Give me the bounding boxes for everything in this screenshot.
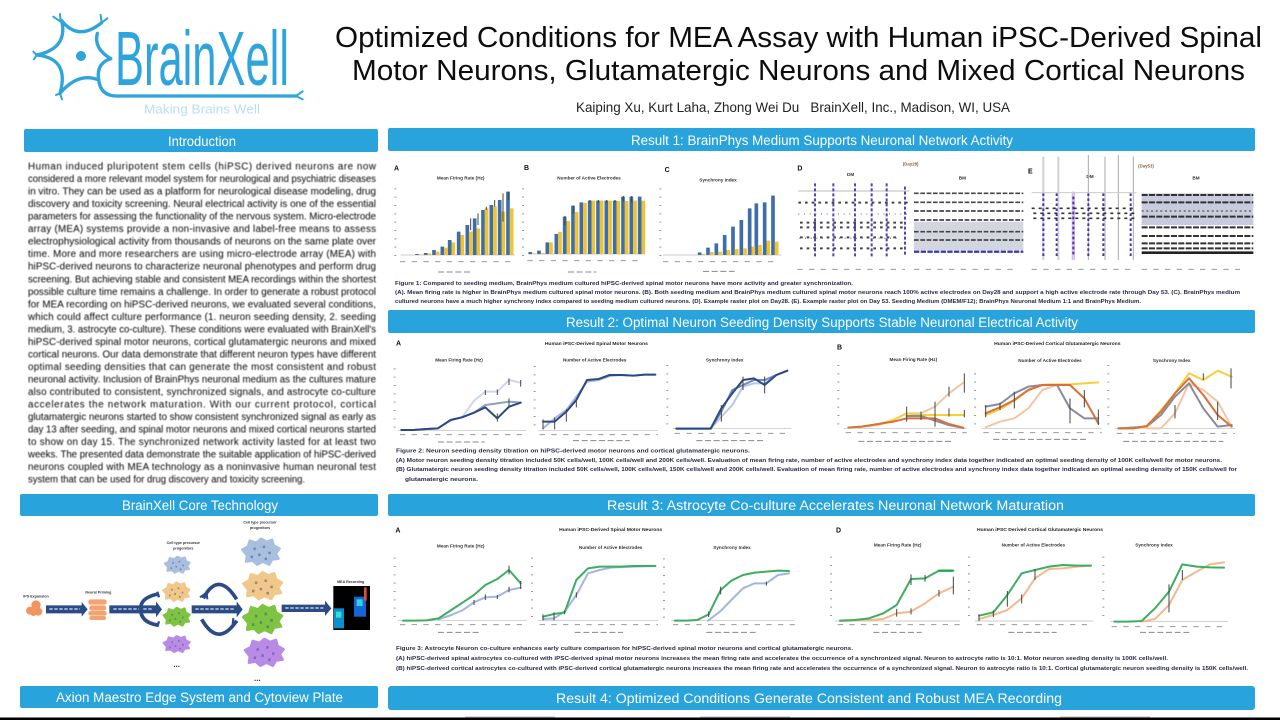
text block: introduction: accelerates the network maturation. With our current protocol, cortical: [28, 400, 376, 411]
panel: figure 3D cortical neurons: D: [836, 527, 841, 534]
caption: figure 2: [396, 448, 1238, 483]
bar chart: mean firing rate: A: [394, 166, 399, 173]
caption: figure 1: Figure 1: Compared to seeding medium, BrainPhys medium cultured hiPSC-derived spinal motor neurons have more activity and greater synchronization.: [395, 281, 853, 287]
text block: introduction: which could affect culture performance (1. neuron seeding density, 2. seeding: [27, 312, 376, 323]
line chart: synchrony index: Synchrony Index: [1153, 358, 1191, 363]
text block: introduction: neurons coupled with MEA technology as a noninvasive human neuronal test: [28, 462, 376, 473]
line chart: mean firing rate: [395, 358, 526, 442]
caption: figure 2: glutamatergic neurons.: [405, 477, 478, 483]
labels: diagram text: Cell type precursor: [167, 541, 201, 545]
icon: expanded progenitor cells: [242, 539, 284, 666]
arrow: expansion loop: [200, 584, 238, 634]
text block: introduction: system that can be used for drug discovery and toxicity screening.: [28, 475, 305, 486]
text block: introduction: screening. But achieving stable and consistent MEA recordings within the shortest: [28, 274, 376, 285]
line chart: active electrodes: [535, 358, 658, 441]
line chart: synchrony index: [664, 545, 795, 632]
bar chart: mean firing rate: Mean Firing Rate (Hz): [437, 175, 485, 180]
labels: diagram text: progenitors: [173, 547, 193, 551]
panel: figure 3D cortical neurons: [831, 527, 1228, 632]
bar chart: mean firing rate: [394, 166, 515, 272]
title: Optimized Conditions for MEA Assay with Human iPSC-Derived Spinal: [335, 22, 1262, 54]
text block: introduction: time. More and more researchers are using micro-electrode array (MEA) with: [28, 249, 376, 260]
panel: figure 1 bar charts: [394, 165, 781, 272]
labels: diagram text: progenitors: [250, 526, 270, 530]
text block: introduction: weeks. The presented data demonstrate the suitable application of hiPSC-derived: [27, 450, 376, 461]
caption: figure 3: (A) hiPSC-derived spinal astrocytes co-cultured with iPSC-derived spinal motor neurons increases the mean firing rate and accelerates the occurrence of a synchronized signal. Neuron to astrocyte ratio is 10:1. Motor neuron seeding density is 100K cells/well.: [396, 656, 1168, 662]
diagram: differentiation workflow: [23, 521, 370, 683]
bar chart: synchrony index: C: [665, 167, 670, 174]
logo: BrainXell: [33, 14, 303, 116]
heading: introduction: [24, 129, 378, 152]
text block: introduction: neuronal activity. Inclusion of BrainPhys neuronal medium as the cultures mature: [28, 374, 377, 386]
raster plot: D BrainPhys: [914, 175, 1023, 269]
caption: figure 2: Figure 2: Neuron seeding density titration on hiPSC-derived motor neurons and cortical glutamatergic neurons.: [396, 448, 750, 454]
line chart: mean firing rate: [831, 543, 960, 632]
line chart: synchrony index: [1103, 543, 1228, 632]
panel: figure 2A motor neurons: [395, 340, 791, 442]
heading: Axion Maestro: Axion Maestro Edge System and Cytoview Plate: [56, 690, 343, 705]
raster plot: E BrainPhys: BM: [1192, 175, 1200, 180]
icon: expanded cells stack: [88, 599, 107, 620]
text block: introduction: optimal seeding densities that can generate the most consistent and robust: [28, 362, 376, 373]
caption: figure 3: Figure 3: Astrocyte Neuron co-culture enhances early culture comparison for hiPSC-derived spinal motor neurons and cortical glutamatergic neurons.: [396, 646, 853, 652]
text block: introduction: discovery and toxicity screening. Neural electrical activity is one of the essential: [28, 199, 376, 210]
labels: diagram text: ...: [254, 674, 261, 683]
bottom edge band: [0, 717, 1280, 720]
title: Motor Neurons, Glutamatergic Neurons and Mixed Cortical Neurons: [352, 55, 1245, 87]
labels: diagram text: [23, 521, 364, 683]
text block: introduction: for MEA recording on hiPSC-derived neurons, we evaluated several conditions,: [28, 299, 376, 310]
caption: figure 2: (B) Glutamatergic neuron seeding density titration included 50K cells/well, 100K cells/well, 150K cells/well and 200K cells/well. Evaluation of mean firing rate, number of active electrodes and synchrony index data together indicated an optimal seeding density of 150K cells/well for: [396, 467, 1238, 473]
raster plot: D seeding medium: D: [797, 166, 802, 173]
bar chart: synchrony index: [660, 167, 781, 271]
line chart: synchrony index: Synchrony Index: [1135, 543, 1173, 548]
line chart: mean firing rate: Mean Firing Rate (Hz): [874, 543, 922, 548]
caption: figure 1: (A). Mean firing rate is higher in BrainPhys medium cultured spinal motor neurons. (B). Both seeding medium and BrainPhys medium cultured spinal motor neurons reach 100% active electrodes on Day28 and support a high active electrode rate through Day 53. (C). BrainPhys medium: [395, 290, 1240, 296]
line chart: active electrodes: Number of Active Electrodes: [563, 358, 627, 363]
icon: starting cells: [26, 600, 42, 616]
heading: result 3: [388, 494, 1255, 516]
panel: figure 3D cortical neurons: Human iPSC Derived Cortical Glutamatergic Neurons: [977, 527, 1103, 533]
caption: figure 1: cultured neurons have a much higher synchrony index compared to seeding medium cultured neurons. (D). Example raster plot on Day28. (E). Example raster plot on Day 53. Seeding Medium (DMEM/F12); BrainPhys Neuronal Medium 1:1 and BrainPhys Medium.: [395, 299, 1141, 305]
raster plot: D seeding medium: DM: [847, 172, 854, 177]
text block: introduction: electrophysiological activity from thousands of neurons on the same plate over: [28, 237, 377, 248]
line chart: mean firing rate: Mean Firing Rate (Hz): [435, 358, 483, 363]
raster plot: E BrainPhys: [1142, 175, 1253, 269]
raster plot: D seeding medium: (Day28): [903, 161, 919, 166]
text block: introduction: also contributed to consistent, synchronized signals, and astrocyte co-culture: [28, 387, 377, 398]
labels: diagram text: ...: [173, 660, 180, 669]
panel: figure 2A motor neurons: A: [396, 340, 401, 347]
heading: introduction: Introduction: [168, 134, 236, 149]
line chart: active electrodes: [532, 545, 658, 632]
raster plot: D seeding medium: [797, 161, 919, 269]
line chart: synchrony index: [667, 358, 791, 441]
line chart: mean firing rate: Mean Firing Rate (Hz): [437, 544, 485, 549]
caption: figure 2: (A) Motor neuron seeding density titration included 50K cells/well, 100K cells/well and 200K cells/well. Evaluation of mean firing rate, number of active electrodes and synchrony index data together indicated an optimal seeding density of 100K cells/well for motor neurons.: [396, 458, 1222, 464]
heading: core technology: BrainXell Core Technology: [122, 498, 278, 513]
raster plot: E seeding medium: DM: [1086, 174, 1094, 179]
text block: introduction: medium, 3. astrocyte co-culture). These conditions were evaluated with BrainXell's: [28, 324, 376, 335]
text block: introduction: day 13 after seeding, and spinal motor neurons and mixed cortical neurons started: [28, 425, 376, 436]
icon: MEA heat map: [333, 586, 370, 630]
caption: figure 3: [396, 646, 1248, 672]
line chart: mean firing rate: [838, 357, 967, 441]
panel: figure 1 raster plots: [797, 155, 1253, 269]
bar chart: active electrodes: Number of Active Electrodes: [557, 175, 621, 180]
text block: introduction: glutamatergic neurons started to show consistent synchronized signal as early as: [28, 412, 376, 423]
line chart: active electrodes: Number of Active Electrodes: [579, 545, 643, 550]
arrow: branching curves: [141, 592, 159, 627]
heading: result 4: [388, 686, 1255, 710]
labels: diagram text: MEA Recording: [337, 580, 364, 584]
line chart: active electrodes: Number of Active Electrodes: [1018, 358, 1082, 363]
caption: figure 1: [395, 281, 1240, 305]
text block: introduction: to show on day 15. The synchronized network activity lasted for at least two: [28, 437, 377, 448]
icon: progenitor cells: [163, 556, 190, 652]
line chart: active electrodes: [969, 543, 1093, 632]
line chart: synchrony index: [1108, 358, 1235, 441]
title: [335, 22, 1262, 87]
text block: introduction: cortical neurons. Our data demonstrate that different neuron types have different: [28, 349, 376, 360]
heading: result 4: Result 4: Optimized Conditions Generate Consistent and Robust MEA Recording: [556, 691, 1062, 706]
text block: introduction: possible culture time remains a challenge. In order to generate a robust protocol: [28, 287, 376, 298]
heading: result 3: Result 3: Astrocyte Co-culture Accelerates Neuronal Network Maturation: [607, 498, 1064, 513]
heading: result 2: [388, 310, 1255, 333]
heading: result 1: [388, 128, 1255, 151]
line chart: synchrony index: Synchrony Index: [713, 545, 751, 550]
line chart: active electrodes: [975, 358, 1102, 439]
text block: introduction: considered a more relevant model system for neurological and psychiatric diseases: [28, 174, 376, 185]
panel: introduction: [24, 129, 378, 486]
text block: introduction: [27, 162, 377, 486]
panel: figure 2B cortical neurons: B: [837, 344, 842, 351]
heading: result 2: Result 2: Optimal Neuron Seeding Density Supports Stable Neuronal Electrical Activity: [566, 315, 1078, 330]
arrow: straight arrows: [46, 601, 331, 617]
text block: introduction: hiPSC-derived spinal motor neurons, cortical glutamatergic neurons and mixed: [28, 337, 376, 348]
line chart: active electrodes: Number of Active Electrodes: [1002, 543, 1065, 548]
text block: introduction: array (MEA) systems provide a non-invasive and label-free means to assess: [28, 224, 376, 235]
text block: introduction: parameters for assessing the functionality of the nervous system. Micro-electrode: [28, 212, 377, 223]
text block: introduction: hiPSC-derived neurons to characterize neuronal phenotypes and perform drug: [28, 262, 376, 273]
bar chart: active electrodes: B: [524, 165, 529, 172]
bar chart: synchrony index: Synchrony Index: [699, 177, 737, 182]
text block: introduction: in vitro. They can be used as a platform for neurological disease modeling, drug: [28, 187, 376, 198]
panel: figure 3A motor neurons: Human iPSC-Derived Spinal Motor Neurons: [559, 527, 662, 533]
icon: neuron: [33, 14, 303, 99]
panel: figure 3A motor neurons: A: [395, 527, 400, 534]
tagline: Making Brains Well: [144, 102, 260, 116]
panel: figure 3A motor neurons: [395, 527, 795, 632]
raster plot: D BrainPhys: BM: [959, 175, 966, 180]
raster plot: E seeding medium: [1028, 155, 1154, 269]
labels: diagram text: iPS Expansion: [23, 594, 49, 598]
raster plot: E seeding medium: E: [1028, 168, 1033, 175]
labels: diagram text: Neural Priming: [85, 591, 111, 595]
labels: diagram text: Cell type precursor: [243, 521, 277, 525]
wordmark: BrainXell: [115, 16, 289, 102]
panel: figure 2A motor neurons: Human iPSC-Derived Spinal Motor Neurons: [545, 341, 648, 347]
heading: result 1: Result 1: BrainPhys Medium Supports Neuronal Network Activity: [631, 133, 1013, 148]
bar chart: active electrodes: [523, 165, 645, 272]
line chart: synchrony index: Synchrony Index: [706, 358, 744, 363]
caption: figure 3: (B) hiPSC-derived cortical astrocytes co-cultured with iPSC-derived cortical glutamatergic neurons increases the mean firing rate and accelerates the occurrence of a synchronized signal. Neuron to astrocyte ratio is 10:1. Cortical glutamatergic neuron seeding density is 150K cells/well.: [396, 666, 1248, 672]
heading: Axion Maestro: [20, 686, 378, 708]
raster plot: E seeding medium: (Day53): [1138, 163, 1154, 168]
authors: Kaiping Xu, Kurt Laha, Zhong Wei Du BrainXell, Inc., Madison, WI, USA: [576, 99, 1011, 115]
text block: introduction: Human induced pluripotent stem cells (hiPSC) derived neurons are now: [28, 162, 377, 172]
panel: figure 2B cortical neurons: [837, 341, 1235, 441]
heading: core technology: [20, 494, 378, 516]
panel: figure 2B cortical neurons: Human iPSC-Derived Cortical Glutamatergic Neurons: [994, 341, 1121, 347]
line chart: mean firing rate: [395, 544, 526, 632]
panel: BrainXell core technology: [20, 494, 378, 683]
line chart: mean firing rate: Mean Firing Rate (Hz): [890, 357, 938, 362]
